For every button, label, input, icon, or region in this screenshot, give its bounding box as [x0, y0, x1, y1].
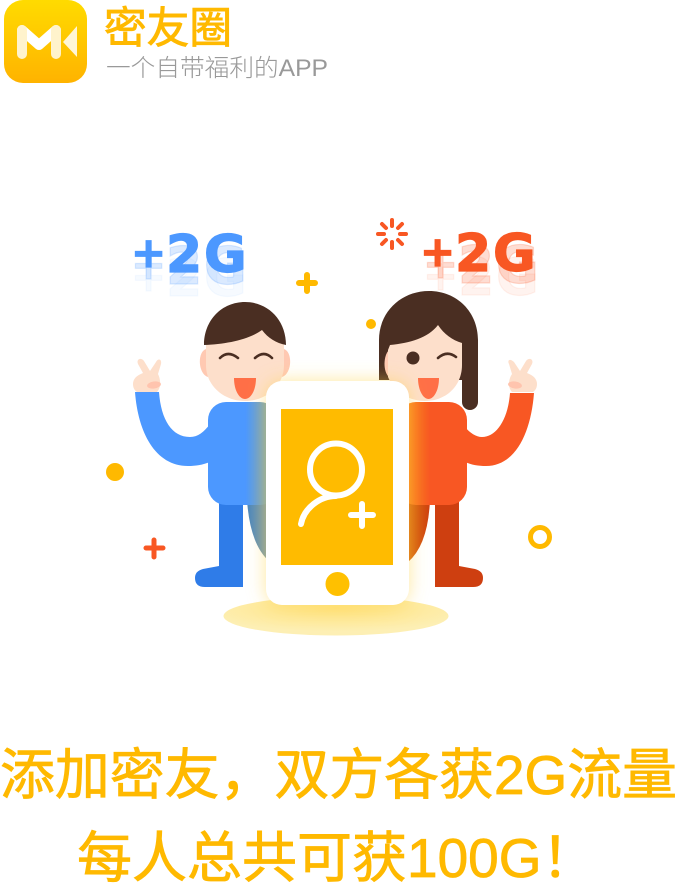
man face — [206, 329, 284, 401]
man ears — [200, 349, 290, 377]
decoration: orange spark — [378, 220, 406, 248]
headline line 1: 添加密友，双方各获2G流量 — [0, 744, 677, 806]
blue +2G label: 2 — [166, 249, 202, 309]
blue +2G label: G — [204, 249, 247, 309]
red +2G label: 2 — [458, 236, 494, 296]
tagline: 一个自带福利的APP — [106, 55, 328, 82]
blue +2G label: G — [204, 225, 247, 285]
woman arm — [465, 393, 534, 466]
woman torso — [398, 402, 467, 505]
red +2G label — [420, 224, 539, 308]
woman mouth — [418, 378, 439, 399]
decoration: yellow plus — [299, 275, 315, 291]
man hair — [204, 302, 286, 345]
blue +2G label — [131, 225, 247, 309]
man mouth — [234, 378, 256, 399]
decoration: orange plus — [146, 540, 163, 557]
decoration: yellow ring — [530, 528, 550, 546]
blue +2G label: + — [131, 240, 166, 289]
woman legs — [435, 500, 483, 587]
phone glow — [266, 381, 409, 605]
red +2G label: + — [423, 251, 458, 300]
phone body — [266, 381, 409, 605]
blue +2G label: G — [204, 237, 247, 297]
woman ear — [384, 350, 392, 377]
decoration: small yellow dot — [366, 319, 376, 329]
man torso — [208, 402, 278, 505]
add friend icon — [301, 444, 373, 526]
man legs — [195, 500, 243, 587]
red +2G label: G — [496, 248, 539, 308]
logo icon — [4, 0, 87, 83]
woman hand — [508, 359, 537, 392]
man skirt shadow — [247, 500, 270, 562]
phone screen — [281, 409, 393, 565]
woman back hair — [379, 291, 478, 410]
phone — [266, 381, 409, 605]
red +2G label: G — [493, 224, 536, 284]
man arm — [135, 392, 210, 466]
woman eye — [406, 352, 420, 364]
blue +2G label: 2 — [166, 237, 202, 297]
blue +2G label: + — [131, 228, 166, 277]
red +2G label: + — [423, 239, 458, 288]
figure: man — [133, 302, 290, 587]
decoration: yellow dot left — [106, 463, 124, 481]
man hand — [133, 359, 161, 392]
floor shadow ellipse — [224, 596, 448, 636]
man eyes — [220, 354, 272, 358]
woman face — [388, 325, 462, 401]
figure: woman — [379, 291, 537, 587]
blue +2G label: 2 — [166, 225, 202, 285]
blue +2G label: + — [131, 252, 166, 301]
woman skirt shadow — [405, 500, 430, 562]
woman wink — [438, 354, 456, 358]
red +2G label: G — [496, 236, 539, 296]
woman thumb — [508, 381, 522, 389]
red +2G label: + — [420, 227, 455, 276]
brand name: 密友圈 — [104, 5, 232, 53]
phone button — [326, 572, 350, 596]
man thumb — [147, 381, 161, 389]
red +2G label: 2 — [458, 248, 494, 308]
red +2G label: 2 — [455, 224, 491, 284]
